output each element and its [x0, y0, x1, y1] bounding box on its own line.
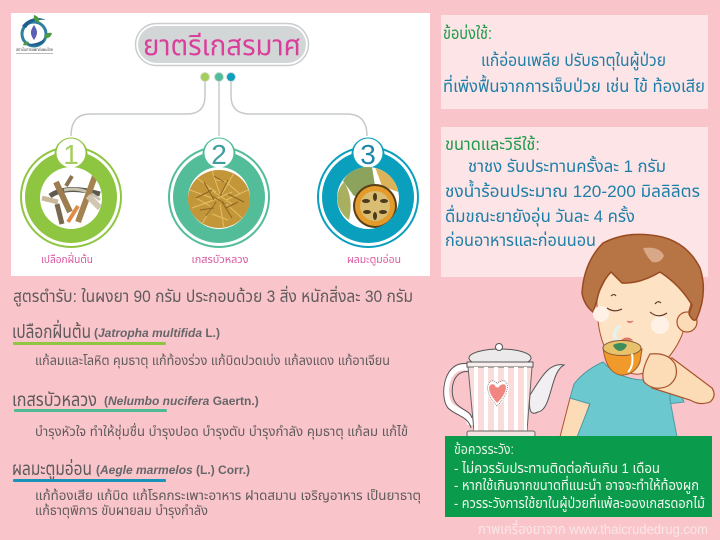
caution list: - ไม่ควรรับประทานติดต่อกันเกิน 1 เดือน [454, 460, 660, 476]
icon: bark pieces [42, 176, 100, 224]
boy: eyes and brows [607, 294, 667, 316]
indications text [443, 50, 705, 96]
herb 3 [12, 457, 421, 518]
boy: cup rim [603, 340, 641, 356]
dosage text: ก่อนอาหารและก่อนนอน [445, 231, 596, 250]
boy: head [597, 260, 692, 374]
boy: cup [603, 348, 642, 375]
illustration: boy drinking tea [560, 234, 714, 437]
formula line: สูตรตำรับ: ในผงยา 90 กรัม ประกอบด้วย 3 สิ่ง หนักสิ่งละ 30 กรัม [13, 285, 413, 308]
connector dots [200, 72, 236, 82]
herb 2: บำรุงหัวใจ ทำให้ชุ่มชื่น บำรุงปอด บำรุงตับ บำรุงกำลัง คุมธาตุ แก้ลม แก้ไข้ [35, 422, 408, 439]
boy: forearm [652, 358, 714, 404]
herb 1 [12, 319, 390, 368]
caution list: - หากใช้เกินจากขนาดที่แนะนำ อาจจะทำให้ท้องผูก [454, 475, 699, 494]
item 3: bael fruit: ผลมะตูมอ่อน [347, 253, 401, 266]
herb 2: เกสรบัวหลวง [12, 390, 97, 411]
heading: indications: ข้อบ่งใช้: [443, 23, 492, 43]
panel: dosage [441, 127, 708, 277]
indications text: ที่เพิ่งฟื้นจากการเจ็บป่วย เช่น ไข้ ท้องเสีย [443, 74, 705, 96]
heading: dosage: ขนาดและวิธีใช้: [445, 134, 540, 154]
boy: cheeks [593, 306, 609, 322]
boy: right sleeve [660, 364, 684, 404]
image credit: ภาพเครื่องยาจาก www.thaicrudedrug.com [478, 519, 708, 537]
herb 1: เปลือกฝิ่นต้น [12, 319, 91, 343]
logo [16, 15, 53, 54]
item 1: bark: เปลือกฝิ่นต้น [41, 252, 93, 266]
item 2: lotus stamens: 2 [211, 139, 227, 170]
herb 3: (Aegle marmelos (L.) Corr.) [96, 463, 250, 477]
boy: hand [643, 354, 676, 388]
boy: nose and mouth [622, 321, 633, 340]
herb 1: แก้ลมและโลหิต คุมธาตุ แก้ท้องร่วง แก้บิดปวดเบ่ง แก้ลงแดง แก้อาเจียน [35, 353, 390, 368]
boy: hair highlight [643, 248, 664, 262]
dosage text: ชาชง รับประทานครั้งละ 1 กรัม [468, 155, 666, 176]
herb 1: (Jatropha multifida L.) [94, 326, 220, 340]
item 2: lotus stamens: เกสรบัวหลวง [192, 254, 249, 266]
item 3: bael fruit: 3 [360, 139, 376, 170]
herb 2 [12, 390, 408, 439]
herb 3: แก้ท้องเสีย แก้บิด แก้โรคกระเพาะอาหาร ฝาดสมาน เจริญอาหาร เป็นยาธาตุ [35, 488, 421, 503]
boy: cup highlight [628, 354, 632, 372]
boy: tea leaf [613, 343, 627, 351]
boy: shirt [570, 362, 677, 437]
herb 3: ผลมะตูมอ่อน [12, 457, 92, 481]
dosage text: ดื่มขณะยายังอุ่น วันละ 4 ครั้ง [445, 204, 635, 227]
indications text: แก้อ่อนเพลีย ปรับธาตุในผู้ป่วย [481, 50, 666, 72]
item 3: bael fruit [318, 138, 418, 266]
item 2: lotus stamens [169, 138, 269, 266]
herb 2: (Nelumbo nucifera Gaertn.) [104, 394, 259, 408]
icon: stamens pile [188, 170, 250, 228]
illustration: teapot [444, 344, 564, 437]
icon: bael fruit slices [337, 167, 400, 228]
title pill: ยาตรีเกสรมาศ [143, 30, 301, 62]
boy: right cheek [651, 316, 669, 334]
caution list [454, 460, 705, 512]
boy: hair [582, 234, 703, 320]
boy: steam [614, 326, 620, 342]
connector lines [71, 80, 367, 136]
dosage text: ชงน้ำร้อนประมาณ 120-200 มิลลิลิตร [445, 179, 700, 201]
panel: formula diagram [11, 13, 430, 276]
logo: สถาบันการแพทย์แผนไทย [16, 46, 53, 52]
herb 3: แก้ธาตุพิการ ขับผายลม บำรุงกำลัง [35, 503, 208, 518]
item 1: bark: 1 [63, 139, 79, 170]
boy: ear [677, 312, 697, 332]
panel: indications [441, 15, 708, 109]
dosage text [445, 155, 700, 250]
callout: cautions [445, 436, 712, 517]
item 1: bark [21, 138, 121, 266]
caution heading: ข้อควรระวัง: [454, 441, 514, 457]
boy: left arm [560, 398, 590, 437]
